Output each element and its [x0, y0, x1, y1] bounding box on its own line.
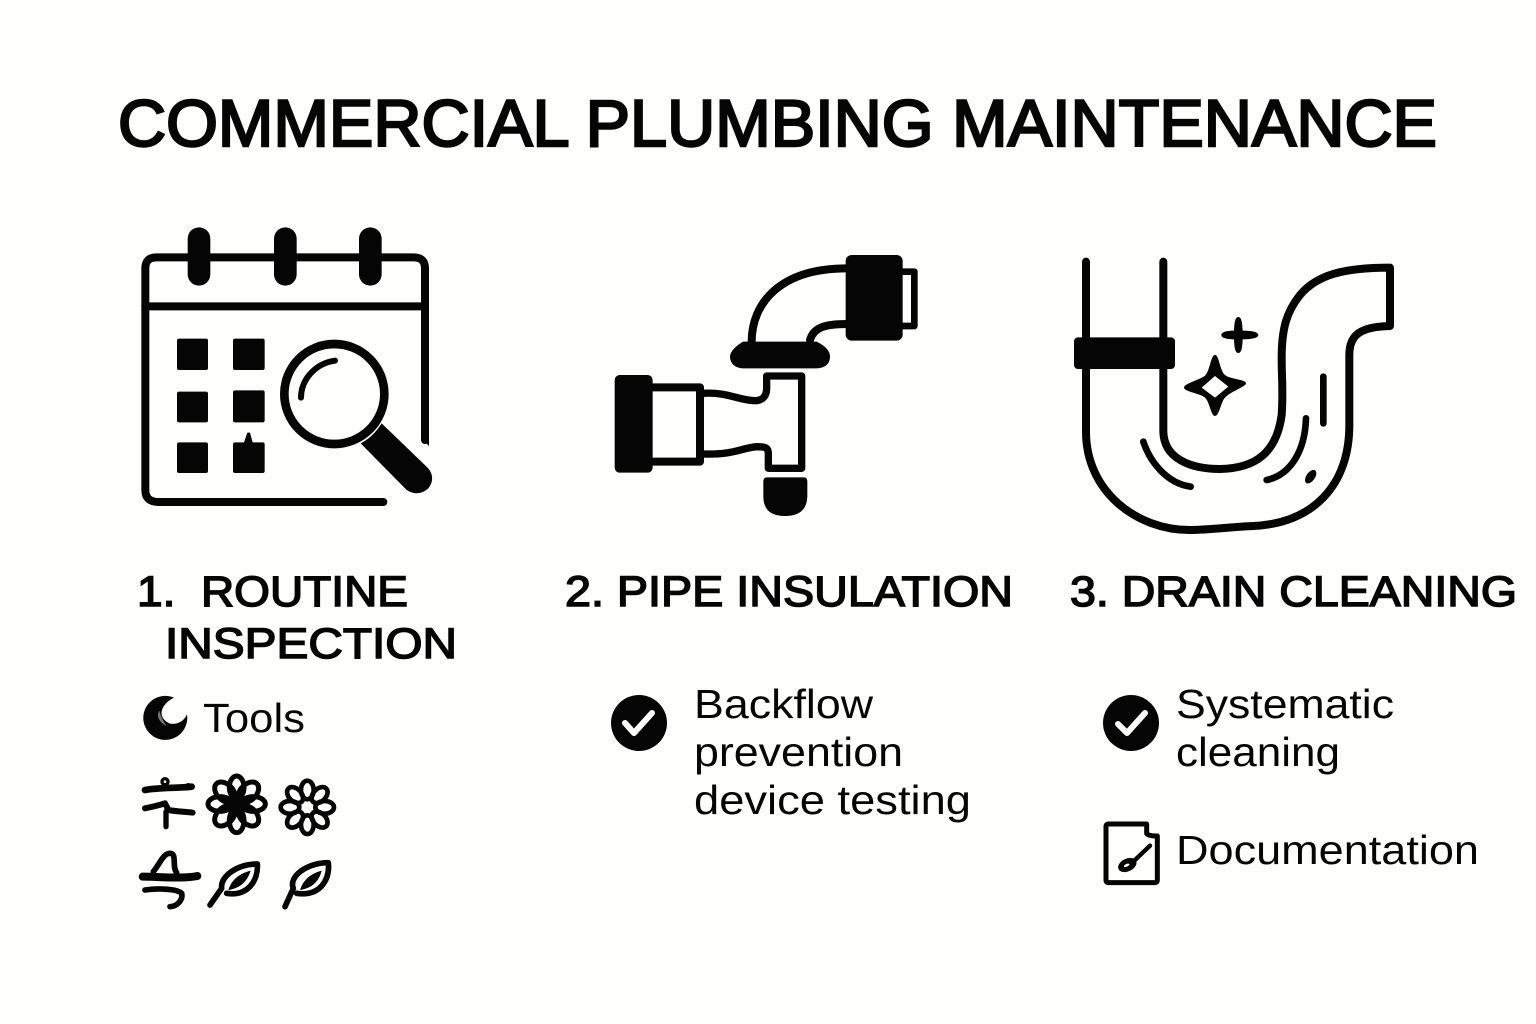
heading: routine inspection: INSPECTION	[165, 620, 457, 668]
text: systematic cleaning: cleaning	[1176, 729, 1340, 775]
text: tools: Tools	[203, 695, 305, 741]
icon: pipe fittings	[615, 255, 914, 516]
heading: routine inspection	[137, 568, 457, 668]
heading: pipe insulation: 2. PIPE INSULATION	[565, 568, 1013, 616]
heading: routine inspection: 1. ROUTINE	[137, 568, 408, 616]
icons: tool glyph grid	[143, 776, 334, 907]
icon: calendar with magnifying glass	[145, 227, 432, 502]
icon: check circle	[1103, 695, 1159, 751]
text: systematic cleaning: Systematic	[1176, 681, 1394, 727]
text: documentation: Documentation	[1176, 827, 1479, 873]
icon: p-trap pipe with sparkles	[1074, 262, 1390, 530]
icon: crescent tools	[143, 696, 187, 740]
title: COMMERCIAL PLUMBING MAINTENANCE	[118, 86, 1437, 160]
text: backflow prevention device testing: Backflow	[694, 681, 873, 727]
text: backflow prevention device testing	[694, 681, 971, 823]
text: systematic cleaning	[1176, 681, 1394, 775]
heading: drain cleaning: 3. DRAIN CLEANING	[1070, 568, 1517, 616]
text: backflow prevention device testing: device testing	[694, 777, 971, 823]
panel: routine inspection	[137, 227, 457, 907]
panel: drain cleaning	[1070, 262, 1517, 883]
icon: check circle	[611, 695, 667, 751]
icon: document	[1106, 824, 1157, 883]
text: backflow prevention device testing: prevention	[694, 729, 903, 775]
panel: pipe insulation	[565, 255, 1013, 823]
